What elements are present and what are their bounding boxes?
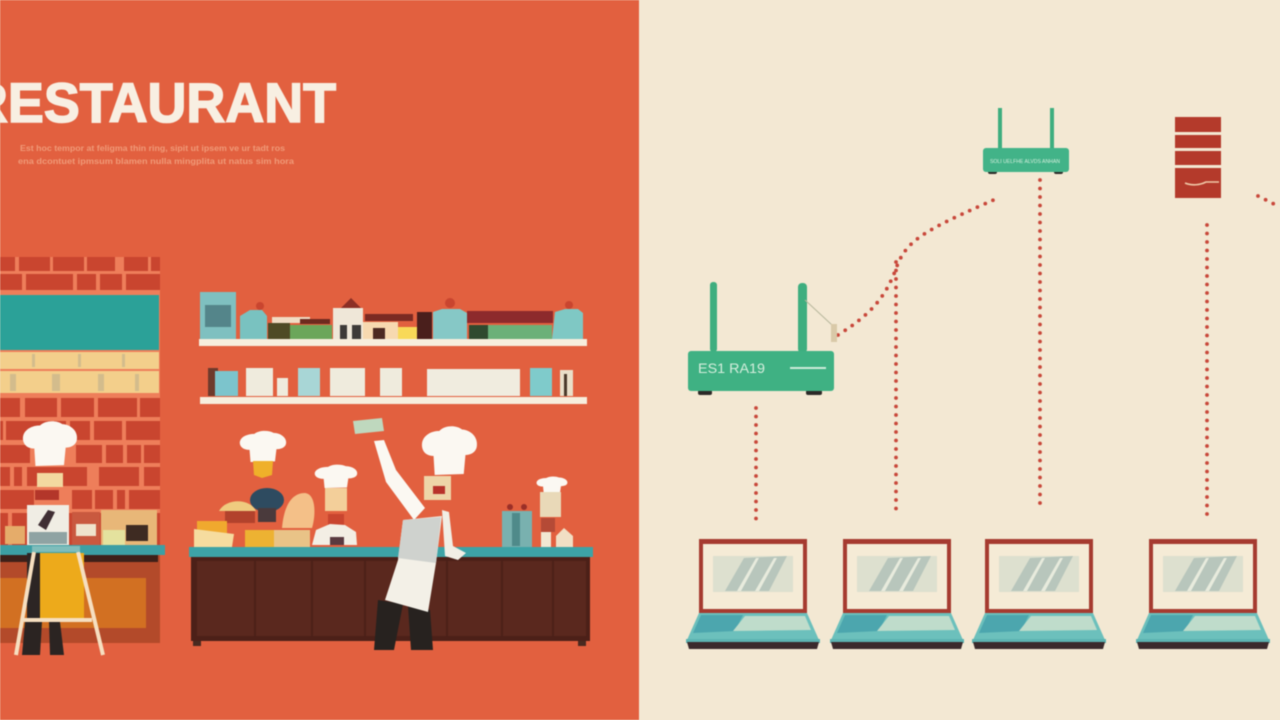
- icon: laptop 1: [686, 539, 820, 649]
- panel: network background: [639, 0, 1280, 720]
- main counter: [189, 547, 593, 646]
- subtitle text block: [18, 143, 294, 166]
- panel: teal sign: [0, 295, 159, 350]
- icon: small router: SOLI UELFHE ALVDS ANHAN: [990, 159, 1060, 165]
- dotted connection lines: [756, 180, 1280, 520]
- panel: restaurant background: [0, 0, 639, 720]
- shelf: upper: [199, 292, 587, 346]
- icon: large router: ES1 RA19: [698, 360, 765, 376]
- easel with sign: [16, 546, 103, 655]
- icon: large router: [688, 282, 837, 395]
- subtitle text block: ena dcontuet ipmsum blamen nulla mingplita ut natus sim hora: [18, 156, 294, 166]
- shelf: lower: [200, 368, 587, 404]
- left chef with items: [5, 421, 157, 545]
- panel: cream menu strips: [0, 350, 160, 397]
- chef with yellow scarf and food pile: [194, 431, 314, 547]
- icon: laptop 2: [830, 539, 964, 649]
- small chef with white dishes: [312, 465, 357, 545]
- main chef raising tray: [353, 418, 477, 650]
- icon: laptop 3: [972, 539, 1106, 649]
- teal pot: [502, 504, 532, 547]
- icon: laptop 4: [1136, 539, 1270, 649]
- icon: small router: [983, 108, 1069, 174]
- panel: brick wall: [0, 257, 160, 546]
- icon: server rack: [1175, 117, 1221, 198]
- left counter: [0, 545, 165, 643]
- subtitle text block: Est hoc tempor at feligma thin ring, sipit ut ipsem ve ur tadt ros: [20, 143, 285, 153]
- small chef with bottles: [537, 476, 573, 547]
